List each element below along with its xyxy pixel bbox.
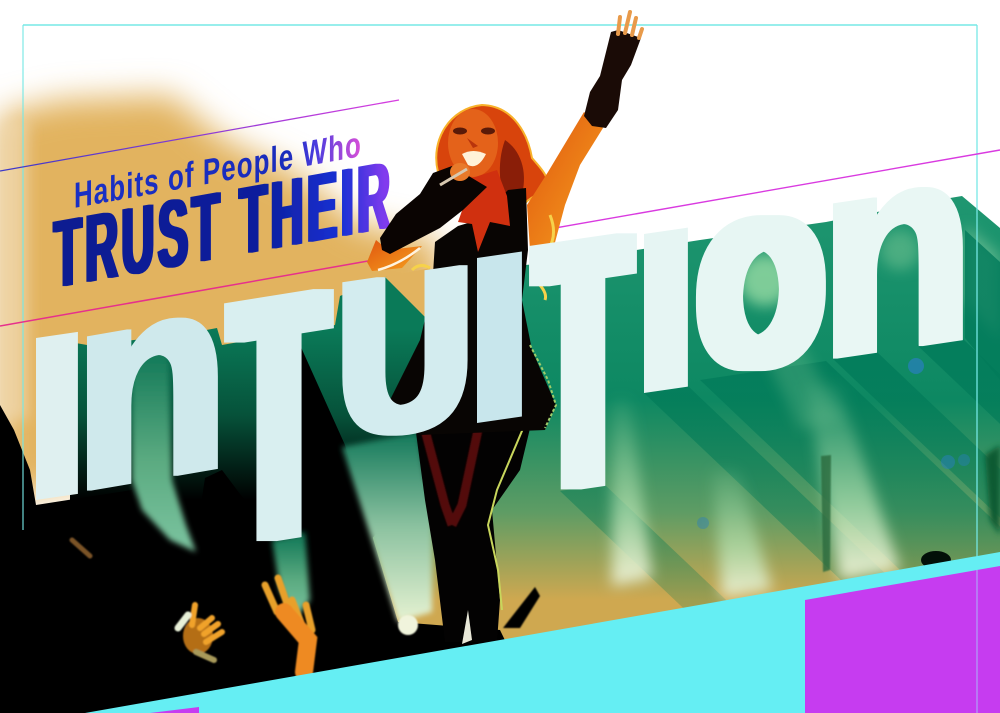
hair xyxy=(436,105,547,218)
microphone arm glove xyxy=(380,166,487,254)
dress and torso xyxy=(390,188,556,435)
diagonal line right xyxy=(555,150,1000,228)
audience silhouette right xyxy=(921,445,1000,569)
title xyxy=(54,123,394,308)
main word INTUITION xyxy=(16,70,979,634)
raised arm glove xyxy=(584,12,642,128)
diagonal line below title xyxy=(0,261,368,326)
letter I: I xyxy=(16,284,98,556)
frame line over magenta xyxy=(976,570,978,713)
raised hands in crowd xyxy=(72,540,312,672)
light beams left xyxy=(132,345,432,635)
cyan bottom band xyxy=(85,552,1000,713)
magenta panel right xyxy=(805,566,1000,713)
microphone stand silhouette xyxy=(821,455,831,572)
letter N second: n xyxy=(816,70,979,433)
letter I second: I xyxy=(455,204,544,480)
green stage light background xyxy=(300,196,1000,713)
letter I third: I xyxy=(623,181,709,448)
hand on microphone xyxy=(450,163,470,181)
singer figure xyxy=(367,12,642,644)
legs xyxy=(415,412,540,644)
raised arm xyxy=(527,112,603,250)
light beams right xyxy=(612,340,900,598)
tan triangle inside U xyxy=(385,268,430,322)
hair strands xyxy=(412,215,554,300)
microphone xyxy=(440,169,467,185)
title line one: Habits of People Who xyxy=(74,123,362,216)
title line two: TRUST THEIR xyxy=(54,140,394,308)
face xyxy=(448,109,498,177)
magenta tab bottom xyxy=(150,707,199,713)
letter extrusion shadows xyxy=(560,230,1000,713)
letter N: n xyxy=(70,201,234,565)
letter U: U xyxy=(329,219,481,494)
letter T second: T xyxy=(538,159,628,584)
lower arm skin xyxy=(367,240,422,271)
skirt sparkle edge xyxy=(530,345,556,428)
dark stage backdrop left xyxy=(70,277,430,600)
letter O: O xyxy=(698,175,824,419)
neck and chest xyxy=(458,170,510,252)
black crowd area xyxy=(0,345,540,713)
diagonal line above title xyxy=(0,100,399,171)
tan haze background xyxy=(0,95,440,500)
bokeh dots xyxy=(132,358,970,529)
letter T: T xyxy=(233,217,325,634)
